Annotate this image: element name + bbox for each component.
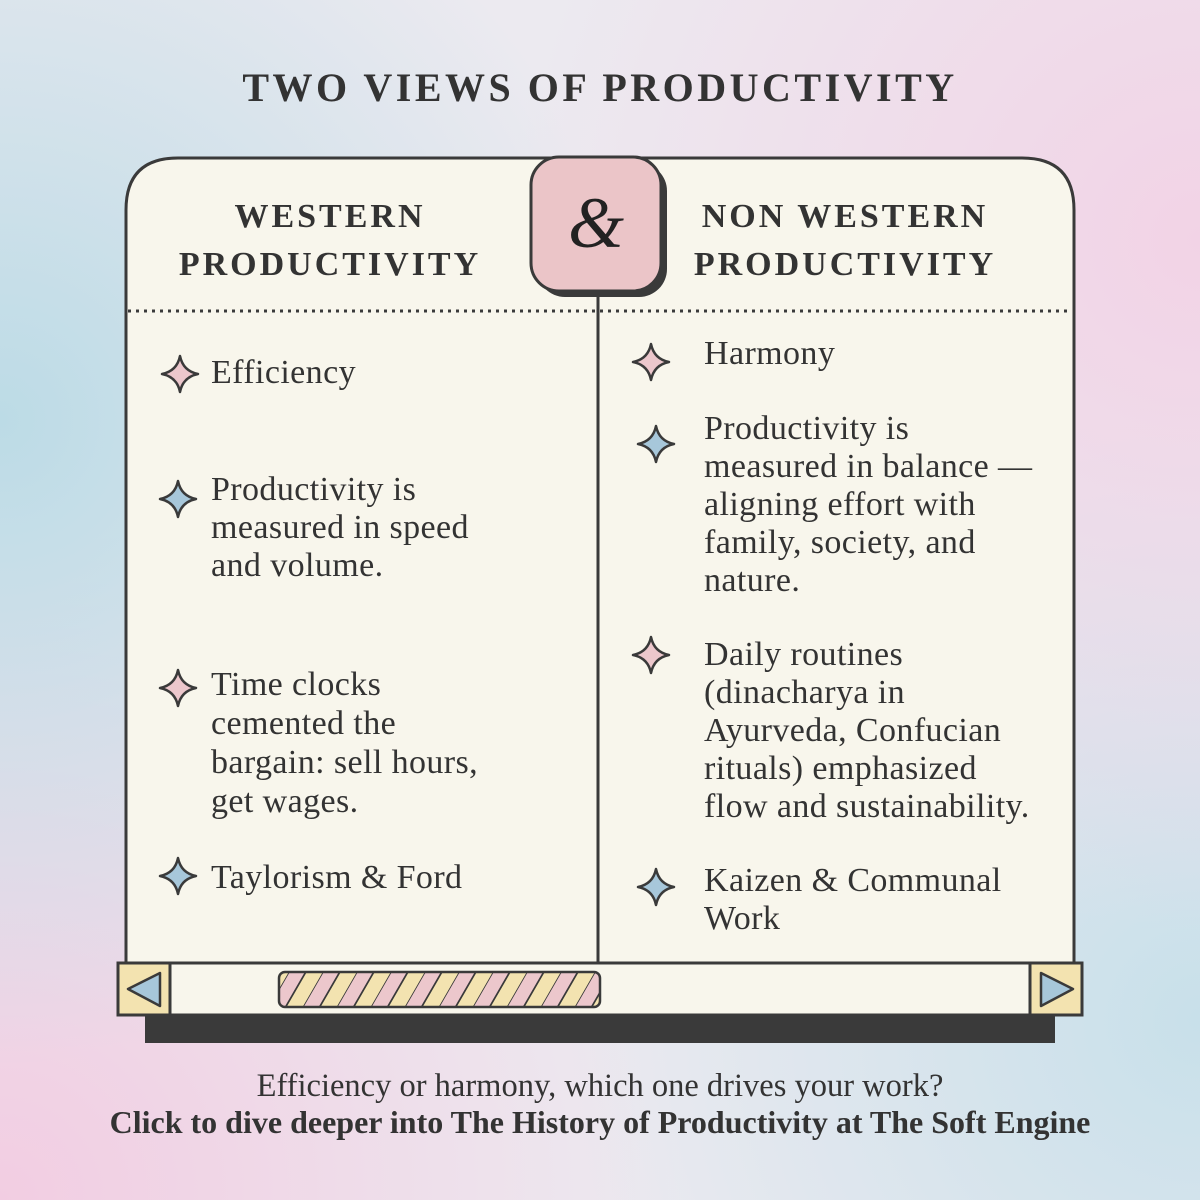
text: measured in balance — [704, 448, 1032, 485]
text: bargain: sell hours, [211, 744, 478, 781]
text: Ayurveda, Confucian [704, 712, 1001, 749]
text: measured in speed [211, 509, 469, 546]
text: Daily routines [704, 636, 903, 673]
heading: western: PRODUCTIVITY [179, 246, 481, 283]
text: Productivity is [211, 471, 416, 508]
text: rituals) emphasized [704, 750, 977, 787]
text: (dinacharya in [704, 674, 905, 711]
text: family, society, and [704, 524, 976, 561]
text: aligning effort with [704, 486, 976, 523]
heading: non western: NON WESTERN [702, 198, 988, 235]
text: and volume. [211, 547, 383, 584]
non western items: Harmony [704, 335, 835, 372]
frame: & [568, 183, 624, 263]
western items: Efficiency [211, 354, 356, 391]
heading: western [179, 198, 481, 283]
text: Work [704, 900, 780, 937]
text: Time clocks [211, 666, 381, 703]
text: flow and sustainability. [704, 788, 1030, 825]
heading: non western: PRODUCTIVITY [694, 246, 996, 283]
text: get wages. [211, 783, 359, 820]
title: TWO VIEWS OF PRODUCTIVITY [242, 65, 958, 110]
text: Taylorism & Ford [211, 859, 462, 896]
text: nature. [704, 562, 800, 599]
text: Kaizen & Communal [704, 862, 1002, 899]
heading: western: WESTERN [234, 198, 426, 235]
text: Productivity is [704, 410, 909, 447]
footer: Click to dive deeper into The History of Productivity at The Soft Engine [110, 1104, 1090, 1140]
footer: Efficiency or harmony, which one drives your work? [257, 1068, 943, 1104]
heading: non western [694, 198, 996, 283]
text: cemented the [211, 705, 396, 742]
footer [110, 1068, 1090, 1140]
